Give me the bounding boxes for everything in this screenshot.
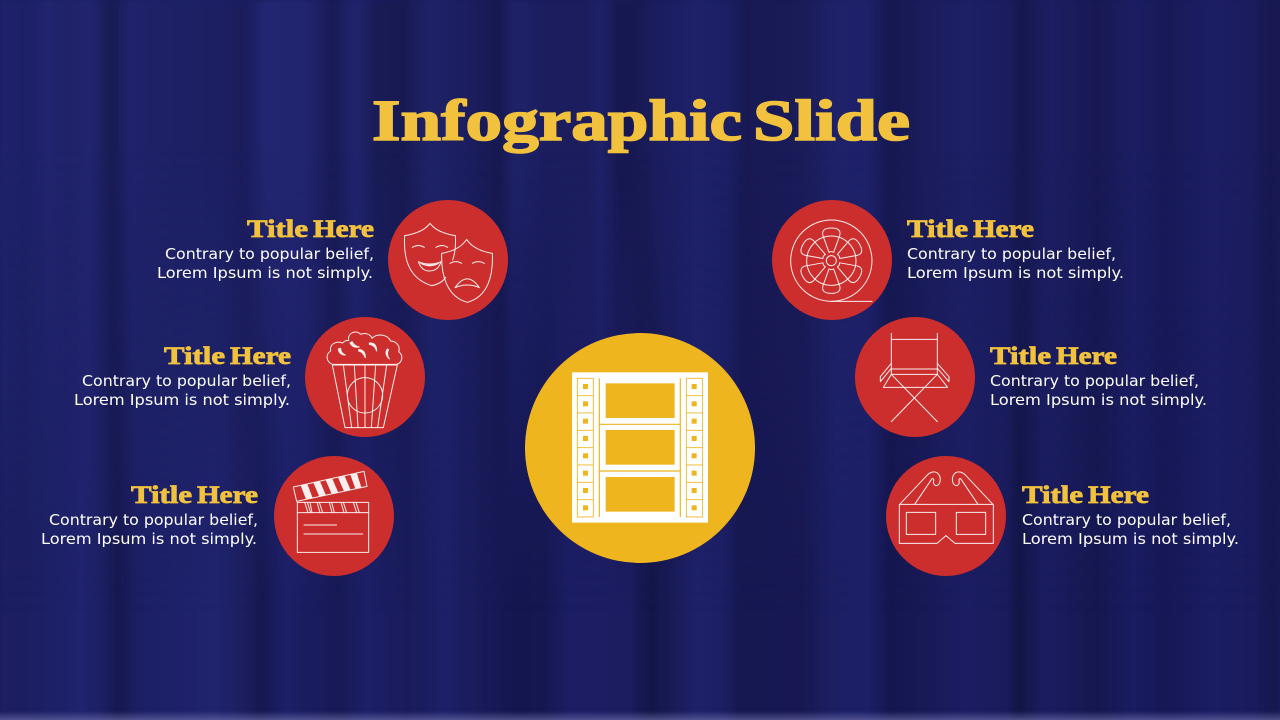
panel: film reel item [772,200,1124,320]
panel: popcorn item [74,317,425,437]
text: director chair item: Title [990,343,1051,370]
text: popcorn item: Title [164,343,225,370]
panel: clapperboard item [41,456,394,576]
text: clapperboard item: Here [197,482,258,509]
text: 3D glasses item: Contrary to popular belief, [1022,511,1231,529]
text: film reel item: Lorem Ipsum is not simply. [907,264,1124,282]
icon: 3D glasses [899,472,993,543]
text: director chair item: Here [1056,343,1117,370]
icon: clapperboard [293,471,369,552]
text: masks item: Lorem Ipsum is not simply. [157,264,373,282]
text: popcorn item [74,343,291,409]
text: director chair item: Lorem Ipsum is not simply. [990,391,1207,409]
circle: masks [388,200,508,320]
panel: director chair item [855,317,1207,437]
circle: film reel [772,200,892,320]
text: clapperboard item: Contrary to popular belief, [49,511,258,529]
text: director chair item: Contrary to popular belief, [990,372,1199,390]
text: clapperboard item [41,482,258,548]
icon: film strip [572,372,708,523]
text: masks item: Here [313,216,374,243]
title [372,88,910,153]
icon: film reel [791,220,872,301]
text: clapperboard item: Lorem Ipsum is not simply. [41,530,257,548]
icon: popcorn [327,332,402,428]
circle: clapperboard [274,456,394,576]
text: film reel item: Contrary to popular belief, [907,245,1116,263]
text: popcorn item: Contrary to popular belief, [82,372,291,390]
text: 3D glasses item: Title [1022,482,1083,509]
text: film reel item [907,216,1124,282]
circle: 3D glasses [886,456,1006,576]
icon: theatre masks [404,223,492,302]
circle: director chair [855,317,975,437]
text: 3D glasses item: Here [1088,482,1149,509]
panel: 3D glasses item [886,456,1239,576]
curtain upper folds [2,0,1022,481]
text: director chair item [990,343,1207,409]
title: Slide [753,88,910,153]
title: Infographic [372,88,742,153]
text: popcorn item: Lorem Ipsum is not simply. [74,391,290,409]
circle: centre [525,333,755,563]
panel: centre film strip [525,333,755,563]
panel: masks item [157,200,508,320]
text: popcorn item: Here [230,343,291,370]
text: masks item: Contrary to popular belief, [165,245,374,263]
text: 3D glasses item [1022,482,1239,548]
icon: director chair [880,333,949,422]
text: masks item [157,216,374,282]
text: 3D glasses item: Lorem Ipsum is not simply. [1022,530,1239,548]
text: film reel item: Title [907,216,968,243]
text: film reel item: Here [973,216,1034,243]
text: clapperboard item: Title [131,482,192,509]
text: masks item: Title [247,216,308,243]
circle: popcorn [305,317,425,437]
